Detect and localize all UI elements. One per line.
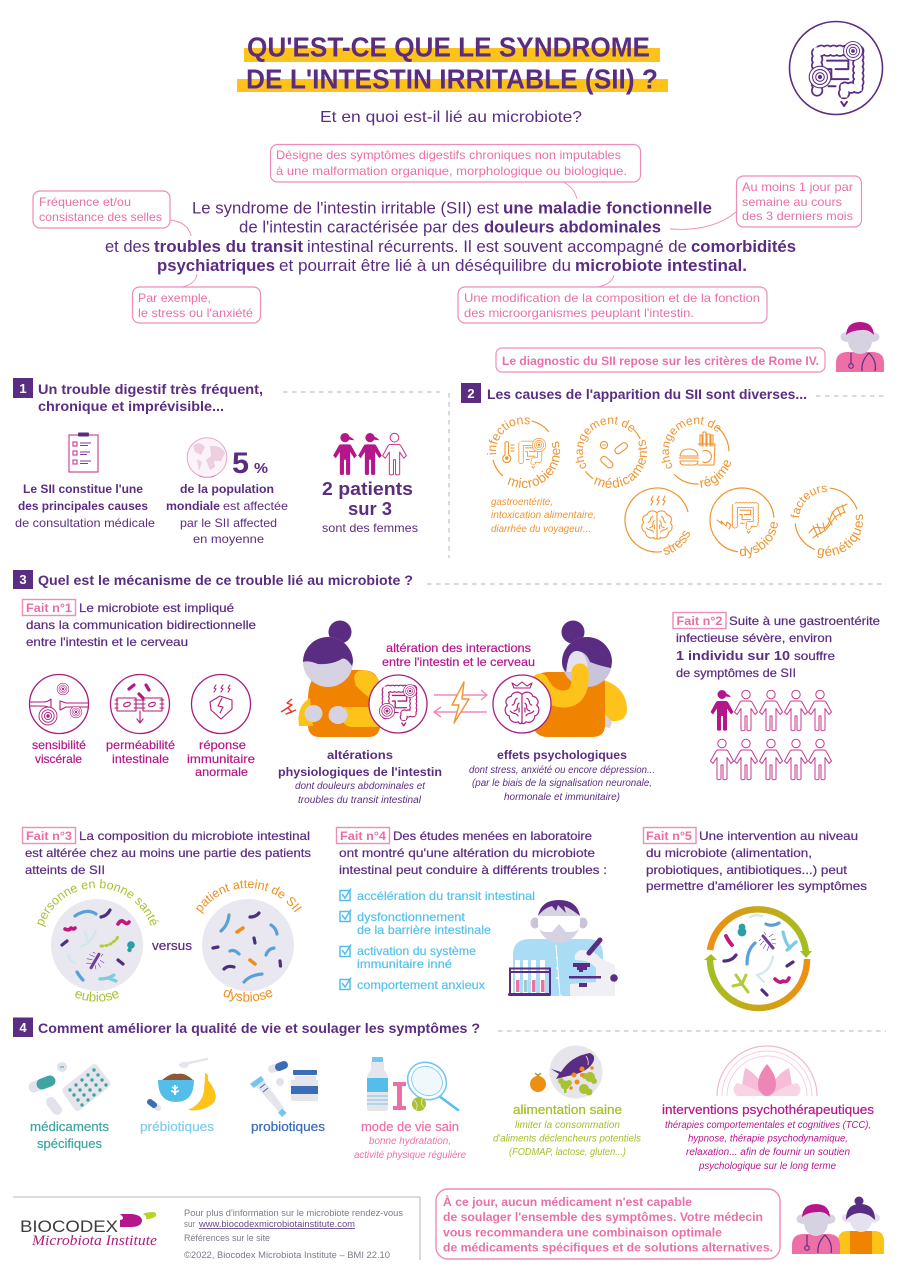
callout: conclusion: À ce jour, aucun médicament n'est capable — [443, 1194, 692, 1209]
label: interventions psychothérapeutiques: relaxation... afin de fournir un soutien — [686, 1147, 850, 1158]
icon: clipboard checklist — [69, 432, 98, 472]
icon: intestine circle — [369, 675, 427, 733]
label: effets psychologiques: hormonale et immunitaire) — [504, 792, 620, 803]
checklist: effects: de la barrière intestinale — [357, 923, 491, 937]
callout: microbiote — [458, 275, 767, 323]
callout: conclusion: vous recommandera une combinaison optimale — [443, 1226, 722, 1240]
fact 2 text: souffre — [794, 649, 835, 663]
cause: facteurs génétiques: facteurs — [790, 486, 827, 518]
label: altérations physiologiques: altérations — [327, 748, 393, 762]
fact 3 text: La composition du microbiote intestinal — [79, 829, 310, 843]
label: interventions psychothérapeutiques: hypnose, thérapie psychodynamique, — [688, 1134, 848, 1144]
cause: infections microbiennes: infections — [487, 418, 530, 454]
text: principales causes: des principales causes — [18, 499, 148, 513]
cause: dysbiose: dysbiose — [740, 522, 778, 558]
fact 2 text: infectieuse sévère, environ — [676, 631, 832, 645]
panel: section 1 — [13, 378, 440, 546]
text: population mondiale: est affectée — [223, 499, 288, 513]
fact 1 text: dans la communication bidirectionnelle — [26, 618, 256, 632]
labels: fact 1 icons: perméabilité — [106, 738, 175, 752]
callout: selles — [33, 191, 191, 236]
section 2 heading: 2 — [467, 386, 475, 401]
label: interventions psychothérapeutiques: thérapies comportementales et cognitives (TCC), — [665, 1120, 871, 1131]
callout: conclusion: de médicaments spécifiques et de solutions alternatives. — [443, 1240, 773, 1254]
section 2 heading — [461, 383, 885, 403]
label: altérations physiologiques: troubles du transit intestinal — [298, 795, 422, 806]
label: altération des interactions: entre l'intestin et le cerveau — [382, 655, 535, 669]
labels: fact 1 icons: réponse — [199, 738, 246, 752]
label: altération des interactions — [382, 641, 535, 669]
checklist: effects: comportement anxieux — [357, 978, 485, 992]
diagram: dysbiose: patient atteint de SII — [196, 880, 302, 914]
footer text: ©2022, Biocodex Microbiota Institute – BMI 22.10 — [184, 1250, 390, 1260]
checklist: effects: dysfonctionnement — [357, 910, 466, 924]
label: alimentation saine: alimentation saine — [513, 1102, 622, 1117]
text: causes infections examples: gastroentérite, — [491, 497, 553, 508]
label: alimentation saine: (FODMAP, lactose, gluten...) — [509, 1147, 626, 1158]
icon: probiotiques — [250, 1065, 318, 1117]
label: alimentation saine — [493, 1102, 641, 1158]
callout: fréquence douleur — [670, 176, 862, 229]
cause: stress: stress — [664, 530, 690, 555]
section 1 heading: Un trouble digestif très fréquent, — [38, 381, 263, 397]
cause: infections microbiennes — [487, 418, 560, 488]
label: effets psychologiques: (par le biais de la signalisation neuronale, — [472, 778, 652, 789]
labels: fact 1 icons: immunitaire — [187, 752, 255, 766]
text: causes infections examples: intoxication alimentaire, — [491, 510, 596, 521]
icon: brain circle — [493, 675, 551, 733]
definition paragraph: de l'intestin caractérisée par des — [239, 218, 479, 236]
label: médicaments spécifiques: spécifiques — [37, 1136, 102, 1151]
icon: sensibilité viscérale — [30, 674, 88, 734]
text: population mondiale: en moyenne — [193, 532, 264, 546]
cause: changement de médicaments — [576, 416, 648, 488]
labels: fact 1 icons: sensibilité — [32, 738, 86, 752]
cause: stress — [624, 487, 690, 555]
label: alimentation saine: limiter la consommation — [515, 1120, 620, 1131]
stat: 2 patients sur 3: sur 3 — [348, 499, 392, 519]
text: principales causes: Le SII constitue l'une — [23, 482, 143, 496]
text: population mondiale: par le SII affected — [180, 516, 277, 530]
callout: diagnostic: Le diagnostic du SII repose sur les critères de Rome IV. — [502, 354, 819, 368]
text: population mondiale: mondiale — [166, 499, 220, 513]
fact 2 text: Suite à une gastroentérite — [729, 614, 880, 628]
label: mode de vie sain: mode de vie sain — [361, 1119, 459, 1134]
label: effets psychologiques: dont stress, anxiété ou encore dépression... — [469, 765, 655, 776]
labels: fact 1 icons: intestinale — [112, 752, 169, 766]
label: mode de vie sain: activité physique régulière — [354, 1150, 466, 1161]
cause: facteurs génétiques — [790, 486, 864, 558]
icon: lotus — [717, 1046, 817, 1096]
text: population mondiale: de la population — [180, 482, 274, 496]
diagram: eubiose — [37, 879, 159, 1002]
panel: section 4 — [13, 1018, 886, 1172]
callout: conclusion: de soulager l'ensemble des symptômes. Votre médecin — [443, 1210, 763, 1224]
fact 4 text: Des études menées en laboratoire — [393, 829, 592, 843]
title: QU'EST-CE QUE LE SYNDROME — [247, 32, 650, 62]
fact 2 text: 1 individu sur 10 — [676, 648, 790, 663]
fact 4 text: intestinal peut conduire à différents troubles : — [339, 863, 607, 877]
icon: perméabilité intestinale — [110, 674, 170, 734]
callout: selles: consistance des selles — [39, 210, 162, 224]
icon: mode de vie sain — [367, 1055, 458, 1111]
labels: fact 1 icons: viscérale — [35, 752, 82, 766]
footer text: Références sur le site — [184, 1233, 270, 1243]
diagram: dysbiose: dysbiose — [224, 988, 272, 1002]
checklist: effects: immunitaire inné — [357, 957, 452, 971]
label: versus: versus — [152, 938, 193, 953]
diagram: eubiose: personne en bonne santé — [37, 879, 159, 927]
logo: Biocodex Microbiota Institute: BIOCODEX — [20, 1217, 118, 1236]
cause: infections microbiennes: microbiennes — [508, 442, 560, 488]
section 4 heading: 4 — [19, 1020, 27, 1035]
diagram: microbiota cycle — [704, 909, 812, 1008]
fact 5 text: Fait n°5 — [646, 829, 692, 843]
callout: diagnostic — [496, 348, 825, 372]
checklist: effects: activation du système — [357, 944, 476, 958]
label: mode de vie sain — [354, 1119, 466, 1161]
text: causes infections examples — [491, 497, 596, 535]
fact 2 text: de symptômes de SII — [676, 666, 796, 680]
text: population mondiale — [166, 482, 288, 546]
cause: changement de médicaments: changement de — [576, 416, 634, 469]
stat: 5 %: 5 — [232, 447, 249, 480]
definition paragraph: psychiatriques — [157, 257, 275, 275]
label: médicaments spécifiques: médicaments — [30, 1119, 110, 1134]
label: prébiotiques: prébiotiques — [140, 1119, 215, 1134]
icon: médicaments — [34, 1062, 110, 1111]
callout: conclusion — [436, 1189, 780, 1259]
fact 1 text: entre l'intestin et le cerveau — [26, 635, 188, 649]
definition paragraph: troubles du transit — [154, 238, 304, 256]
stat: 2 patients sur 3 — [322, 479, 418, 535]
section 4 heading: Comment améliorer la qualité de vie et soulager les symptômes ? — [38, 1020, 480, 1036]
label: alimentation saine: d'aliments déclencheurs potentiels — [493, 1134, 641, 1144]
labels: fact 1 icons: anormale — [195, 765, 248, 779]
illustration: patient holding belly — [281, 620, 384, 737]
checklist: effects: accélération du transit intestinal — [357, 889, 535, 903]
section 3 heading: 3 — [19, 572, 27, 587]
icon: réponse immunitaire — [192, 674, 250, 734]
label: altérations physiologiques — [278, 748, 442, 806]
diagram: eubiose: eubiose — [75, 991, 119, 1002]
section 1 heading: 1 — [19, 381, 27, 396]
illustration: patient holding head — [533, 620, 627, 737]
panel: section 2 — [461, 383, 884, 558]
title: DE L'INTESTIN IRRITABLE (SII) ? — [246, 64, 658, 94]
fact 5 text: probiotiques, antibiotiques...) peut — [646, 863, 848, 877]
icon: prébiotiques — [150, 1059, 216, 1110]
fact 1 text: Le microbiote est impliqué — [79, 601, 234, 615]
subtitle: Et en quoi est-il lié au microbiote? — [320, 109, 582, 126]
icon: doctor and patient — [792, 1196, 884, 1254]
callout: stress: Par exemple, — [138, 291, 211, 305]
label: interventions psychothérapeutiques: interventions psychothérapeutiques — [662, 1102, 875, 1117]
label: altération des interactions: altération des interactions — [386, 641, 531, 655]
stat: 5 % — [232, 447, 268, 480]
callout: fréquence douleur: des 3 derniers mois — [742, 209, 853, 223]
fact 4 text: ont montré qu'une altération du microbiote — [339, 846, 595, 860]
fact 5 text: permettre d'améliorer les symptômes — [646, 879, 867, 893]
icon: globe — [187, 438, 227, 478]
fact 2 text — [673, 612, 880, 680]
fact 1 text: Fait n°1 — [26, 601, 72, 615]
callout: maladie fonctionnelle — [270, 144, 640, 199]
label: médicaments spécifiques — [30, 1119, 110, 1151]
cause: changement de médicaments: médicaments — [594, 440, 648, 488]
callout: microbiote: Une modification de la composition et de la fonction — [464, 291, 760, 305]
definition paragraph: et des — [105, 238, 150, 256]
stat: 2 patients sur 3: 2 patients — [322, 479, 413, 499]
checklist: effects — [340, 888, 535, 992]
cause: changement de régime — [662, 416, 731, 488]
fact 5 text: Une intervention au niveau — [699, 829, 858, 843]
label: probiotiques: probiotiques — [251, 1119, 326, 1134]
footer text: Pour plus d'information sur le microbiote rendez-vous — [184, 1208, 404, 1218]
section 3 heading — [13, 570, 886, 589]
footer text: sur — [184, 1219, 195, 1229]
fact 4 text: Fait n°4 — [340, 829, 386, 843]
text: principales causes — [15, 482, 155, 530]
footer text — [184, 1208, 404, 1260]
logo: Biocodex Microbiota Institute: Microbiota Institute — [31, 1233, 157, 1249]
illustration: scientist with microscope — [508, 900, 618, 996]
callout: maladie fonctionnelle: Désigne des symptômes digestifs chroniques non imputables — [276, 148, 621, 162]
callout: selles: Fréquence et/ou — [39, 195, 131, 209]
definition paragraph: comorbidités — [691, 238, 796, 256]
fact 3 text: Fait n°3 — [26, 829, 72, 843]
stat: 5 %: % — [254, 460, 268, 477]
callout: stress — [132, 274, 260, 323]
fact 5 text: du microbiote (alimentation, — [646, 846, 812, 860]
fact 3 text — [22, 828, 311, 877]
callout: microbiote: des microorganismes peuplant l'intestin. — [464, 306, 694, 320]
section 4 heading — [13, 1018, 886, 1037]
definition paragraph: microbiote intestinal. — [575, 257, 747, 275]
icon: three people — [333, 433, 406, 475]
callout: stress: le stress ou l'anxiété — [138, 306, 253, 320]
fact 4 text — [336, 828, 607, 877]
text: principales causes: de consultation médicale — [15, 516, 155, 530]
definition paragraph: une maladie fonctionnelle — [503, 200, 712, 218]
callout: fréquence douleur: semaine au cours — [742, 195, 842, 209]
definition paragraph: et pourrait être lié à un déséquilibre du — [279, 257, 571, 275]
cause: dysbiose — [709, 487, 778, 558]
label: effets psychologiques — [469, 748, 655, 803]
icon: doctor — [836, 322, 884, 372]
footer text: www.biocodexmicrobiotainstitute.com — [198, 1219, 355, 1229]
diagram: dysbiose — [196, 880, 302, 1002]
icon: alimentation saine — [530, 1046, 602, 1098]
labels: fact 1 icons — [32, 738, 255, 779]
fact 1 text — [22, 600, 256, 649]
section 1 heading — [13, 378, 440, 414]
label: interventions psychothérapeutiques: psychologique sur le long terme — [698, 1161, 836, 1172]
definition paragraph: Le syndrome de l'intestin irritable (SII) est — [192, 200, 499, 218]
fact 3 text: est altérée chez au moins une partie des patients — [25, 846, 311, 860]
title — [237, 32, 668, 94]
section 1 heading: chronique et imprévisible... — [38, 398, 224, 414]
section 2 heading: Les causes de l'apparition du SII sont diverses... — [487, 386, 807, 402]
callout: maladie fonctionnelle: à une malformation organique, morphologique ou biologique. — [276, 164, 627, 178]
label: mode de vie sain: bonne hydratation, — [369, 1136, 451, 1147]
cause: facteurs génétiques: génétiques — [817, 514, 864, 558]
label: altérations physiologiques: dont douleurs abdominales et — [295, 781, 426, 792]
icon: intestine in circle — [790, 22, 882, 114]
section 3 heading: Quel est le mécanisme de ce trouble lié au microbiote ? — [38, 572, 413, 588]
icon grid: 1 in 10 people — [710, 690, 832, 780]
fact 3 text: atteints de SII — [25, 863, 105, 877]
stat: 2 patients sur 3: sont des femmes — [322, 521, 418, 535]
cause: changement de régime: changement de — [662, 416, 720, 469]
arrows: bidirectional — [434, 690, 487, 717]
footer — [13, 1197, 420, 1260]
fact 2 text: Fait n°2 — [676, 614, 723, 628]
cause: changement de régime: régime — [700, 460, 731, 488]
label: effets psychologiques: effets psychologiques — [497, 748, 627, 762]
definition paragraph: douleurs abdominales — [484, 218, 661, 236]
label: altérations physiologiques: physiologiques de l'intestin — [278, 765, 442, 779]
fact 5 text — [644, 828, 867, 893]
text: causes infections examples: diarrhée du voyageur... — [491, 524, 591, 535]
callout: fréquence douleur: Au moins 1 jour par — [742, 180, 853, 194]
definition paragraph: intestinal récurrents. Il est souvent accompagné de — [307, 238, 687, 256]
logo: Biocodex Microbiota Institute — [20, 1212, 157, 1249]
panel: section 3 — [13, 570, 882, 1048]
definition paragraph — [105, 200, 796, 275]
icon: lightning — [452, 682, 469, 723]
label: interventions psychothérapeutiques — [662, 1102, 875, 1172]
